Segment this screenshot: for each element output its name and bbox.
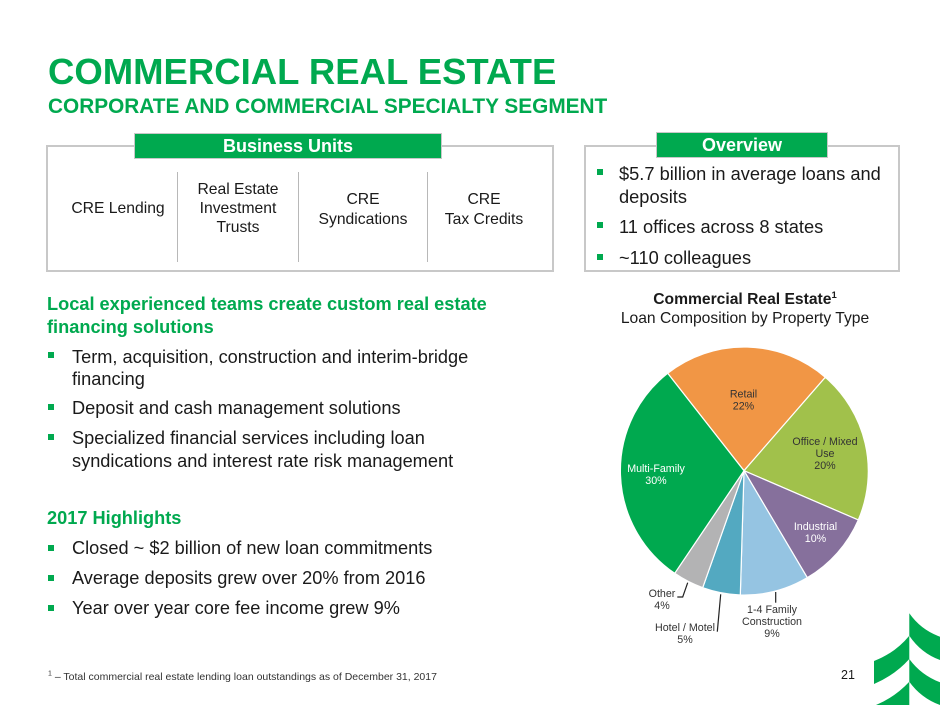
label: 1-4 Family Construction xyxy=(742,592,802,640)
label: 1-4 Family Construction: 1-4 Family xyxy=(747,604,798,616)
unit: Real Estate Investment Trusts: Real Estate xyxy=(197,181,279,198)
slice: Retail xyxy=(668,347,825,471)
chart title xyxy=(621,290,869,326)
label: Multi-Family: Multi-Family xyxy=(627,463,685,475)
slice: Multi-Family xyxy=(620,373,744,573)
label: Other xyxy=(649,583,688,612)
label: 1-4 Family Construction: 9% xyxy=(764,628,780,640)
slice: Industrial xyxy=(744,471,858,578)
local teams heading: Local experienced teams create custom real estate xyxy=(47,294,487,314)
highlights heading: 2017 Highlights xyxy=(47,508,181,528)
business units header: Business Units xyxy=(223,136,353,156)
unit: Real Estate Investment Trusts: Investment xyxy=(200,200,276,217)
text block: local teams: syndications and interest rate risk management xyxy=(72,450,453,470)
text block: local teams xyxy=(47,294,487,471)
label: 1-4 Family Construction: Construction xyxy=(742,616,802,628)
text block: local teams: Specialized financial services including loan xyxy=(72,428,425,448)
icon: logo tree xyxy=(874,613,940,705)
text block: 2017 highlights: Year over year core fee income grew 9% xyxy=(72,598,400,618)
text block: 2017 highlights: Closed ~ $2 billion of new loan commitments xyxy=(72,538,432,558)
unit: CRE Lending: CRE Lending xyxy=(71,200,165,217)
text block: 2017 highlights: Average deposits grew over 20% from 2016 xyxy=(72,568,426,588)
unit: CRE Tax Credits xyxy=(445,191,523,228)
label: Hotel / Motel: Hotel / Motel xyxy=(655,622,715,634)
label: Industrial: 10% xyxy=(805,533,827,545)
overview bullets: deposits xyxy=(619,186,687,206)
text block: local teams: Term, acquisition, construction and interim-bridge xyxy=(72,346,468,366)
label: Industrial: Industrial xyxy=(794,521,837,533)
slice: Hotel / Motel xyxy=(703,471,744,595)
unit: Real Estate Investment Trusts xyxy=(197,181,279,236)
label: Office / Mixed Use: 20% xyxy=(814,460,836,472)
label: Retail: 22% xyxy=(733,400,755,412)
chart title: Commercial Real Estate1 xyxy=(653,290,837,308)
local teams heading: financing solutions xyxy=(47,317,214,337)
overview header xyxy=(656,132,828,158)
label: Office / Mixed Use: Office / Mixed xyxy=(792,436,858,448)
business units header xyxy=(134,133,442,159)
subtitle: CORPORATE AND COMMERCIAL SPECIALTY SEGMENT xyxy=(48,95,607,118)
unit: CRE Syndications: Syndications xyxy=(319,210,407,228)
overview bullets: 11 offices across 8 states xyxy=(619,216,823,237)
business units frame xyxy=(46,145,554,272)
overview header: Overview xyxy=(702,135,782,155)
text block: local teams: Deposit and cash management solutions xyxy=(72,398,401,418)
label: Other: Other xyxy=(649,588,676,600)
slice: 1-4 Family Construction xyxy=(740,471,807,595)
unit: CRE Tax Credits: CRE xyxy=(467,191,501,208)
text block: local teams: financing xyxy=(72,369,145,389)
panel: business units xyxy=(46,133,554,272)
unit: CRE Syndications: CRE xyxy=(346,191,380,208)
chart title: Loan Composition by Property Type xyxy=(621,310,869,326)
overview bullets: ~110 colleagues xyxy=(619,246,751,268)
unit: Real Estate Investment Trusts: Trusts xyxy=(216,219,260,236)
page number: 21 xyxy=(841,668,855,682)
text block: 2017 highlights xyxy=(47,508,432,618)
overview frame xyxy=(584,145,900,272)
label: Retail: Retail xyxy=(730,388,757,400)
label: Hotel / Motel xyxy=(655,594,721,646)
unit: CRE Tax Credits: Tax Credits xyxy=(445,210,523,228)
overview bullets: $5.7 billion in average loans and xyxy=(619,162,881,184)
slice: Office / Mixed Use xyxy=(744,377,868,520)
overview bullets xyxy=(597,162,881,268)
panel: overview xyxy=(584,132,900,272)
label: Other: 4% xyxy=(654,600,670,612)
label: Hotel / Motel: 5% xyxy=(677,634,693,646)
local teams heading xyxy=(47,294,487,337)
slice: Other xyxy=(675,471,744,588)
label: Multi-Family: 30% xyxy=(645,475,667,487)
title: COMMERCIAL REAL ESTATE xyxy=(48,51,556,92)
footnote: 1 – Total commercial real estate lending loan outstandings as of December 31, 2017 xyxy=(48,670,437,683)
unit: CRE Syndications xyxy=(319,191,407,228)
label: Office / Mixed Use: Use xyxy=(815,448,835,460)
